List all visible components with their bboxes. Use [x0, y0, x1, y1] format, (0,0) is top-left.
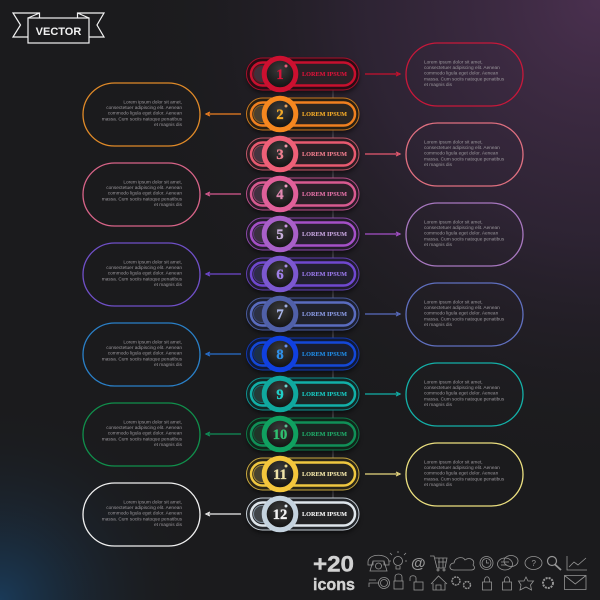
callout 4: et magnis dis — [154, 202, 183, 208]
callout 7: Lorem ipsum dolor sit amet, — [424, 300, 483, 306]
step 4: 4 — [276, 187, 284, 203]
callout 1 — [406, 43, 523, 106]
step 4 — [246, 178, 359, 213]
icon: envelope — [564, 576, 586, 590]
callout 10: consectetuer adipiscing elit. Aenean — [106, 425, 182, 431]
text: at sign: @ — [411, 555, 426, 572]
icon: question bubble: ? — [532, 559, 536, 568]
step 3: LOREM IPSUM — [302, 151, 347, 158]
icon: shopping cart — [430, 556, 447, 571]
callout 6: commodo ligula eget dolor. Aenean — [108, 271, 182, 277]
callout 3: commodo ligula eget dolor. Aenean — [424, 151, 499, 157]
step 11: LOREM IPSUM — [302, 471, 347, 478]
callout 7: et magnis dis — [424, 322, 453, 328]
step 5: LOREM IPSUM — [302, 231, 347, 238]
step 1: 1 — [276, 67, 284, 83]
arrow 11 — [365, 472, 400, 476]
arrow 1 — [365, 72, 400, 76]
step 5 — [246, 218, 359, 253]
callout 12: et magnis dis — [154, 522, 183, 528]
callout 3: consectetuer adipiscing elit. Aenean — [424, 145, 500, 151]
callout 1: et magnis dis — [424, 82, 453, 88]
callout 1: consectetuer adipiscing elit. Aenean — [424, 65, 500, 71]
callout 9: commodo ligula eget dolor. Aenean — [424, 391, 499, 397]
step 7 — [246, 298, 359, 333]
step 12 — [246, 498, 359, 533]
callout 2: et magnis dis — [154, 122, 183, 128]
callout 2 — [83, 83, 200, 146]
step 2: 2 — [276, 107, 284, 123]
callout 4: Lorem ipsum dolor sit amet, — [123, 180, 182, 186]
icon: light bulb — [389, 551, 407, 569]
callout 4 — [83, 163, 200, 226]
callout 8: Lorem ipsum dolor sit amet, — [123, 340, 182, 346]
step 8: 8 — [276, 347, 284, 363]
callout 4: massa. Cum sociis natoque penatibus — [102, 196, 183, 202]
callout 11: commodo ligula eget dolor. Aenean — [424, 471, 499, 477]
callout 6 — [83, 243, 200, 306]
step 11 — [246, 458, 359, 493]
callout 5: commodo ligula eget dolor. Aenean — [424, 231, 499, 237]
callout 8: consectetuer adipiscing elit. Aenean — [106, 345, 182, 351]
callout 5: et magnis dis — [424, 242, 453, 248]
callout 9: consectetuer adipiscing elit. Aenean — [424, 385, 500, 391]
step 9 — [246, 378, 359, 413]
badge: vector ribbon: VECTOR — [36, 26, 81, 38]
callout 7: commodo ligula eget dolor. Aenean — [424, 311, 499, 317]
step 12: 12 — [273, 507, 287, 523]
step 1 — [246, 58, 359, 93]
callout 9: Lorem ipsum dolor sit amet, — [424, 380, 483, 386]
timeline spine — [332, 88, 334, 503]
icon: gear badge — [543, 578, 553, 588]
callout 10: massa. Cum sociis natoque penatibus — [102, 436, 183, 442]
arrow 10 — [206, 432, 241, 436]
callout 11: Lorem ipsum dolor sit amet, — [424, 460, 483, 466]
icon: star badge — [518, 577, 534, 590]
callout 11: et magnis dis — [424, 482, 453, 488]
icon: cloud — [450, 558, 474, 570]
step 2 — [246, 98, 359, 133]
callout 5: consectetuer adipiscing elit. Aenean — [424, 225, 500, 231]
arrow 12 — [206, 512, 241, 516]
callout 3 — [406, 123, 523, 186]
callout 8: et magnis dis — [154, 362, 183, 368]
callout 10 — [83, 403, 200, 466]
callout 7: massa. Cum sociis natoque penatibus — [424, 316, 505, 322]
arrow 3 — [365, 152, 400, 156]
callout 6: Lorem ipsum dolor sit amet, — [123, 260, 182, 266]
step 6 — [246, 258, 359, 293]
icon: house — [431, 576, 447, 590]
heading: +20 icons: +20 — [313, 552, 354, 576]
icon: gears — [452, 577, 470, 588]
step 5: 5 — [276, 227, 284, 243]
callout 1: Lorem ipsum dolor sit amet, — [424, 60, 483, 66]
step 8 — [246, 338, 359, 373]
heading: +20 icons — [313, 552, 355, 594]
icon: person one — [482, 577, 492, 590]
callout 2: Lorem ipsum dolor sit amet, — [123, 100, 182, 106]
callout 2: commodo ligula eget dolor. Aenean — [108, 111, 182, 117]
callout 6: massa. Cum sociis natoque penatibus — [102, 276, 183, 282]
icon: question bubble — [525, 556, 542, 570]
callout 2: consectetuer adipiscing elit. Aenean — [106, 105, 182, 111]
icon: clock — [480, 556, 493, 570]
arrow 5 — [365, 232, 400, 236]
heading: +20 icons: icons — [313, 575, 355, 594]
callout 12 — [83, 483, 200, 546]
callout 6: et magnis dis — [154, 282, 183, 288]
icon: speech bubbles — [498, 556, 518, 570]
callout 10: et magnis dis — [154, 442, 183, 448]
callout 1: commodo ligula eget dolor. Aenean — [424, 71, 499, 77]
step 7: LOREM IPSUM — [302, 311, 347, 318]
callout 3: Lorem ipsum dolor sit amet, — [424, 140, 483, 146]
step 11: 11 — [273, 467, 287, 483]
callout 12: Lorem ipsum dolor sit amet, — [123, 500, 182, 506]
icon: magnifier — [548, 556, 561, 570]
step 10 — [246, 418, 359, 453]
callout 9 — [406, 363, 523, 426]
callout 8: massa. Cum sociis natoque penatibus — [102, 356, 183, 362]
callout 11 — [406, 443, 523, 506]
step 6: 6 — [276, 267, 284, 283]
callout 11: massa. Cum sociis natoque penatibus — [424, 476, 505, 482]
callout 10: commodo ligula eget dolor. Aenean — [108, 431, 182, 437]
icon: telephone — [368, 555, 389, 571]
callout 8 — [83, 323, 200, 386]
callout 11: consectetuer adipiscing elit. Aenean — [424, 465, 500, 471]
icon: padlock closed — [394, 574, 403, 589]
arrow 7 — [365, 312, 400, 316]
icon: padlock open — [410, 576, 423, 590]
callout 3: massa. Cum sociis natoque penatibus — [424, 156, 505, 162]
callout 5 — [406, 203, 523, 266]
icon set — [368, 551, 587, 590]
arrow 6 — [206, 272, 241, 276]
step 6: LOREM IPSUM — [302, 271, 347, 278]
badge: vector ribbon — [13, 13, 104, 43]
callout 6: consectetuer adipiscing elit. Aenean — [106, 265, 182, 271]
icon: key ring — [369, 578, 390, 588]
callout 7: consectetuer adipiscing elit. Aenean — [424, 305, 500, 311]
arrow 8 — [206, 352, 241, 356]
step 3: 3 — [276, 147, 284, 163]
callout 5: Lorem ipsum dolor sit amet, — [424, 220, 483, 226]
callout 9: massa. Cum sociis natoque penatibus — [424, 396, 505, 402]
icon: person two — [502, 577, 512, 590]
callout 10: Lorem ipsum dolor sit amet, — [123, 420, 182, 426]
callout 1: massa. Cum sociis natoque penatibus — [424, 76, 505, 82]
callout 4: consectetuer adipiscing elit. Aenean — [106, 185, 182, 191]
step 9: 9 — [276, 387, 284, 403]
step 8: LOREM IPSUM — [302, 351, 347, 358]
callout 3: et magnis dis — [424, 162, 453, 168]
icon: line chart — [567, 556, 587, 570]
step 10: LOREM IPSUM — [302, 431, 347, 438]
step 7: 7 — [276, 307, 284, 323]
callout 12: commodo ligula eget dolor. Aenean — [108, 511, 182, 517]
callout 12: consectetuer adipiscing elit. Aenean — [106, 505, 182, 511]
arrow 4 — [206, 192, 241, 196]
callout 5: massa. Cum sociis natoque penatibus — [424, 236, 505, 242]
callout 4: commodo ligula eget dolor. Aenean — [108, 191, 182, 197]
callout 2: massa. Cum sociis natoque penatibus — [102, 116, 183, 122]
step 1: LOREM IPSUM — [302, 71, 347, 78]
step 9: LOREM IPSUM — [302, 391, 347, 398]
arrow 2 — [206, 112, 241, 116]
step 4: LOREM IPSUM — [302, 191, 347, 198]
callout 8: commodo ligula eget dolor. Aenean — [108, 351, 182, 357]
callout 7 — [406, 283, 523, 346]
step 2: LOREM IPSUM — [302, 111, 347, 118]
callout 9: et magnis dis — [424, 402, 453, 408]
step 3 — [246, 138, 359, 173]
callout 12: massa. Cum sociis natoque penatibus — [102, 516, 183, 522]
step 10: 10 — [273, 427, 287, 443]
step 12: LOREM IPSUM — [302, 511, 347, 518]
arrow 9 — [365, 392, 400, 396]
